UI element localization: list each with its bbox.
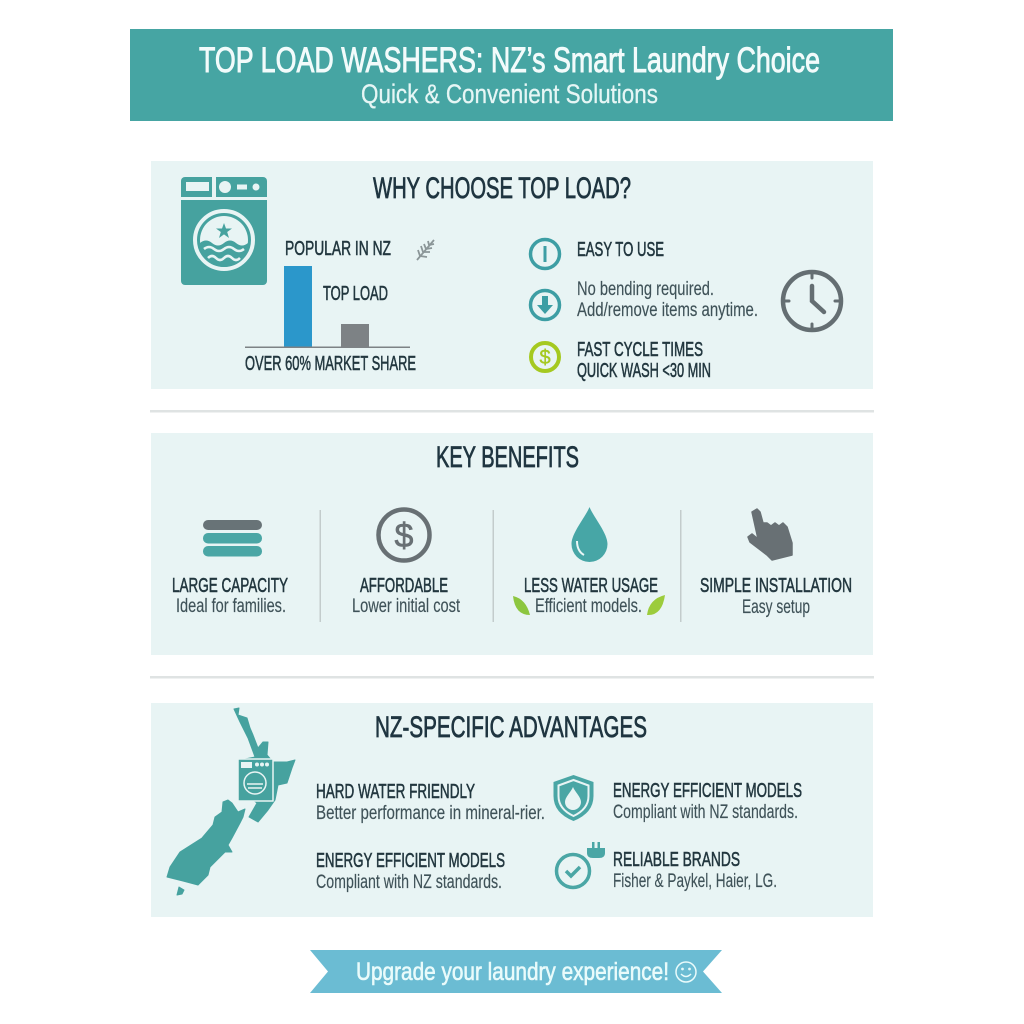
- icon: green dollar: [531, 343, 559, 371]
- label: popular in nz: POPULAR IN NZ: [285, 238, 391, 260]
- label: market share: OVER 60% MARKET SHARE: [245, 353, 416, 375]
- panel: why choose top load: [151, 161, 873, 389]
- icon: smiley: [676, 962, 696, 982]
- icon: shield with drop: [554, 775, 594, 821]
- icon: power: [530, 240, 560, 268]
- text: efficient models: Efficient models.: [535, 596, 642, 617]
- text: easy to use: EASY TO USE: [577, 239, 664, 261]
- text: quick wash: QUICK WASH <30 MIN: [577, 360, 711, 382]
- text: better performance: Better performance in mineral-rier.: [316, 803, 545, 824]
- text: compliant right: Compliant with NZ standards.: [613, 802, 798, 823]
- bar chart: market share: [245, 266, 410, 348]
- icon: check circle with plug: [556, 842, 605, 888]
- panel: nz specific advantages: [151, 703, 873, 917]
- title: TOP LOAD WASHERS: NZ’s Smart Laundry Choice: [199, 41, 820, 80]
- icon: left leaf: [513, 596, 530, 615]
- text: affordable: AFFORDABLE: [360, 575, 448, 597]
- heading: nz specific: NZ-SPECIFIC ADVANTAGES: [375, 711, 647, 744]
- text: ideal for families: Ideal for families.: [176, 596, 286, 617]
- text: upgrade: Upgrade your laundry experience!: [356, 958, 669, 986]
- heading: why choose: WHY CHOOSE TOP LOAD?: [373, 172, 631, 205]
- text: fisher paykel: Fisher & Paykel, Haier, LG.: [613, 871, 777, 892]
- text: no bending: No bending required.: [577, 279, 714, 300]
- icon: clock: [783, 272, 841, 330]
- subtitle: Quick & Convenient Solutions: [361, 79, 658, 109]
- map: new zealand: [167, 708, 295, 895]
- icon: water drop: [572, 507, 608, 562]
- icon: dollar coin: [378, 510, 430, 560]
- text: energy efficient right: ENERGY EFFICIENT MODELS: [613, 780, 802, 802]
- icon: dollar coin: $: [395, 517, 414, 555]
- divider: [150, 676, 874, 678]
- text: simple installation: SIMPLE INSTALLATION: [700, 575, 852, 597]
- text: hard water friendly: HARD WATER FRIENDLY: [316, 781, 475, 803]
- divider: [150, 410, 874, 412]
- header banner: [130, 29, 893, 121]
- icon: right leaf: [647, 595, 665, 615]
- panel: key benefits: [151, 433, 873, 655]
- heading: key benefits: KEY BENEFITS: [436, 441, 579, 474]
- text: energy efficient left: ENERGY EFFICIENT MODELS: [316, 850, 505, 872]
- icon: pointing hand: [748, 509, 792, 560]
- icon: down arrow: [530, 290, 560, 320]
- text: fast cycle times: FAST CYCLE TIMES: [577, 339, 703, 361]
- text: reliable brands: RELIABLE BRANDS: [613, 849, 740, 871]
- icon: stacked layers: [203, 520, 262, 556]
- text: less water usage: LESS WATER USAGE: [524, 575, 658, 597]
- text: compliant left: Compliant with NZ standards.: [316, 872, 502, 893]
- text: easy setup: Easy setup: [742, 597, 810, 618]
- text: add remove: Add/remove items anytime.: [577, 300, 758, 321]
- icon: fern: [417, 240, 434, 260]
- text: lower initial cost: Lower initial cost: [352, 596, 461, 617]
- text: large capacity: LARGE CAPACITY: [172, 575, 288, 597]
- icon: washer on map: [238, 759, 273, 801]
- call to action banner: [310, 950, 722, 993]
- icon: washing machine: [181, 177, 267, 285]
- label: top load: TOP LOAD: [323, 283, 388, 305]
- icon: green dollar: $: [539, 347, 551, 369]
